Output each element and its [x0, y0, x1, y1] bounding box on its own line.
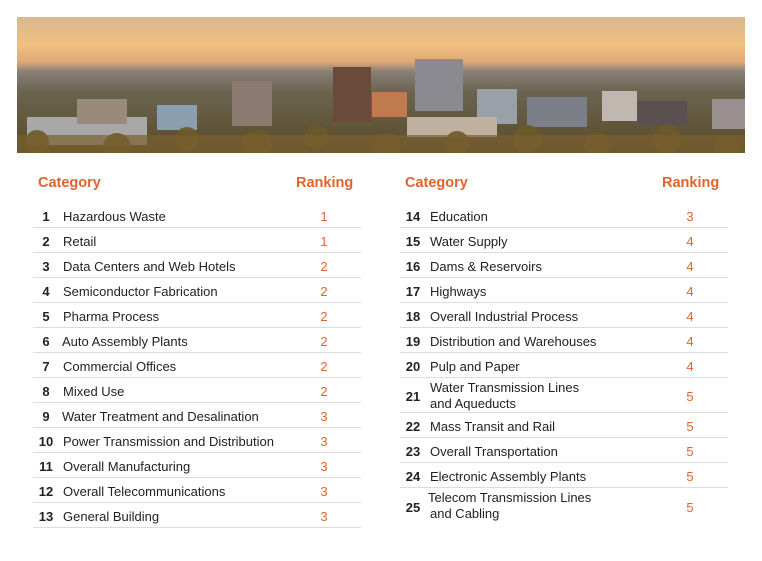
right rows: 5 — [686, 444, 694, 459]
right rows: Telecom Transmission Lines — [428, 490, 591, 505]
left rows: General Building — [63, 509, 159, 524]
right rows: 5 — [686, 419, 694, 434]
right rows: Highways — [430, 284, 486, 299]
right rows: 16 — [406, 259, 420, 274]
left rows: 9 — [42, 409, 50, 424]
left rows: 10 — [39, 434, 53, 449]
left rows: 5 — [42, 309, 50, 324]
right rows: Pulp and Paper — [430, 359, 520, 374]
right rows: 5 — [686, 500, 694, 515]
right rows: 20 — [406, 359, 420, 374]
right rows: 4 — [686, 309, 694, 324]
left rows: 2 — [320, 284, 328, 299]
left rows: 3 — [320, 509, 328, 524]
right table — [405, 175, 719, 191]
left rows: Overall Manufacturing — [63, 459, 190, 474]
right rows: 4 — [686, 334, 694, 349]
left rows: 2 — [320, 259, 328, 274]
right rows: Water Transmission Lines — [430, 380, 579, 395]
right rows: 4 — [686, 259, 694, 274]
left rows — [33, 209, 361, 528]
left rows: 7 — [42, 359, 50, 374]
right rows: Dams & Reservoirs — [430, 259, 542, 274]
right header: Category — [405, 175, 468, 191]
left rows: Auto Assembly Plants — [62, 334, 188, 349]
left rows: 3 — [42, 259, 50, 274]
left rows: 6 — [42, 334, 50, 349]
left header: Category — [38, 175, 101, 191]
right rows: 22 — [406, 419, 420, 434]
left rows: 12 — [39, 484, 53, 499]
right rows: 17 — [406, 284, 420, 299]
right rows: 4 — [686, 359, 694, 374]
right rows: 24 — [406, 469, 420, 484]
left rows: 2 — [320, 334, 328, 349]
left rows: 1 — [320, 209, 328, 224]
right table: Ranking — [662, 175, 719, 191]
right rows: 19 — [406, 334, 420, 349]
left rows: 2 — [320, 384, 328, 399]
left table: Ranking — [296, 175, 353, 191]
left table — [38, 175, 353, 191]
left rows: 1 — [320, 234, 328, 249]
right rows: and Aqueducts — [430, 396, 516, 411]
left rows: Retail — [63, 234, 96, 249]
left rows: 11 — [39, 459, 53, 474]
left rows: Commercial Offices — [63, 359, 176, 374]
left rows: Overall Telecommunications — [63, 484, 225, 499]
right rows: 21 — [406, 389, 420, 404]
left rows: 13 — [39, 509, 53, 524]
left rows: 1 — [42, 209, 50, 224]
left rows: Power Transmission and Distribution — [63, 434, 274, 449]
left rows: Pharma Process — [63, 309, 159, 324]
left rows: 3 — [320, 434, 328, 449]
right rows: Water Supply — [430, 234, 508, 249]
right rows: Distribution and Warehouses — [430, 334, 596, 349]
right rows: 4 — [686, 284, 694, 299]
left rows: 4 — [42, 284, 50, 299]
left rows: 2 — [320, 309, 328, 324]
left rows: Water Treatment and Desalination — [62, 409, 259, 424]
left rows: 2 — [42, 234, 50, 249]
right rows: 25 — [406, 500, 420, 515]
right rows: 4 — [686, 234, 694, 249]
left rows: 3 — [320, 484, 328, 499]
right rows: 14 — [406, 209, 420, 224]
right rows: 5 — [686, 469, 694, 484]
right rows: and Cabling — [430, 506, 499, 521]
left rows: 3 — [320, 409, 328, 424]
right rows: Mass Transit and Rail — [430, 419, 555, 434]
left rows: Mixed Use — [63, 384, 124, 399]
right rows — [400, 209, 728, 521]
right rows: 15 — [406, 234, 420, 249]
left rows: Semiconductor Fabrication — [63, 284, 218, 299]
right rows: Overall Industrial Process — [430, 309, 578, 324]
left rows: 2 — [320, 359, 328, 374]
right rows: Electronic Assembly Plants — [430, 469, 586, 484]
right rows: 18 — [406, 309, 420, 324]
right rows: 23 — [406, 444, 420, 459]
right rows: Overall Transportation — [430, 444, 558, 459]
left rows: 8 — [42, 384, 50, 399]
left rows: Data Centers and Web Hotels — [63, 259, 235, 274]
right rows: Education — [430, 209, 488, 224]
left rows: 3 — [320, 459, 328, 474]
photo: city skyline — [17, 17, 745, 153]
right rows: 5 — [686, 389, 694, 404]
right rows: 3 — [686, 209, 694, 224]
left rows: Hazardous Waste — [63, 209, 166, 224]
